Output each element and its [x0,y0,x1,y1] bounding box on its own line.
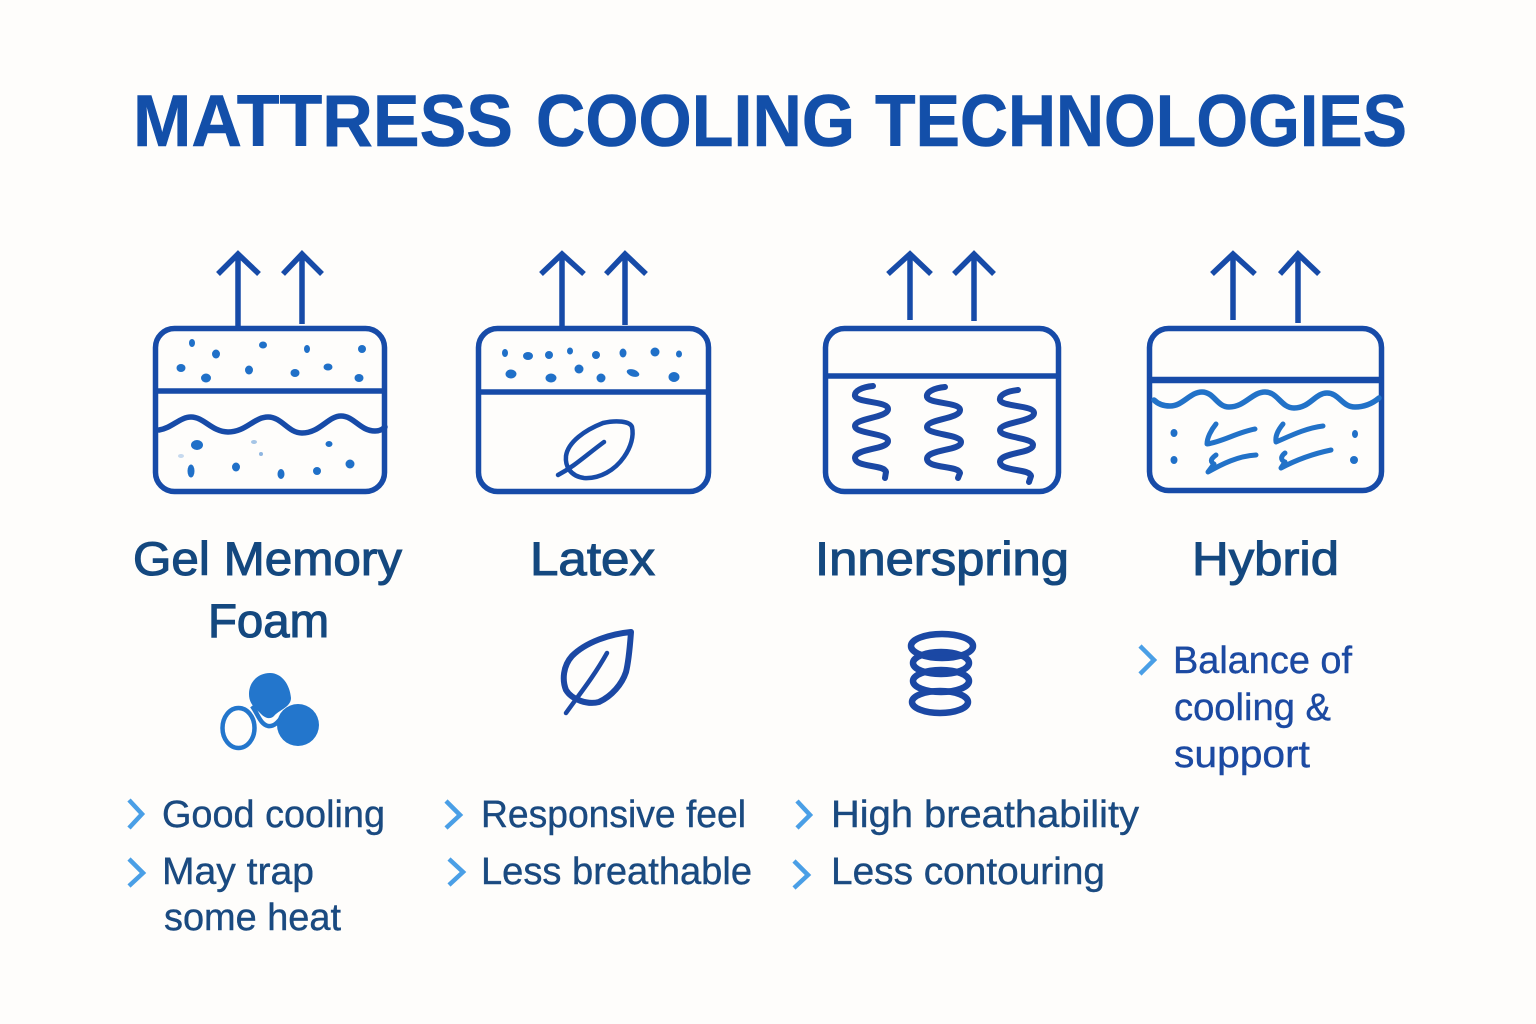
title: MATTRESS [133,81,513,162]
title [133,81,1407,162]
diagram: gel foam mattress [156,328,385,492]
list: gel pros and cons: Good cooling [162,794,385,836]
heading: gel memory foam: Gel Memory [133,532,403,585]
diagram: hybrid mattress [1150,328,1382,490]
list: hybrid benefit: Balance of [1173,640,1352,682]
heading: gel memory foam [133,532,403,647]
list: latex pros and cons [446,794,752,893]
panel: hybrid [1140,254,1382,776]
list: hybrid benefit: support [1174,734,1310,776]
list: gel pros and cons: some heat [164,897,341,939]
panel: innerspring [794,254,1139,893]
icon: coil spring [911,634,973,713]
panel: gel memory foam [129,254,403,939]
icon: heat arrows hybrid [1212,254,1319,323]
list: latex pros and cons: Responsive feel [481,794,746,836]
panel: latex [446,254,752,893]
icon: heat arrows latex [541,254,646,327]
list: hybrid benefit [1140,640,1352,776]
list: innerspring pros and cons: Less contouring [831,851,1105,893]
list: hybrid benefit: cooling & [1174,687,1331,729]
list: gel pros and cons: May trap [162,851,314,893]
diagram: innerspring mattress [826,328,1058,492]
list: innerspring pros and cons [794,794,1139,893]
title: COOLING [536,81,855,162]
diagram: latex mattress [478,328,708,492]
heading: latex: Latex [530,532,655,585]
list: innerspring pros and cons: High breathability [831,794,1139,836]
heading: innerspring: Innerspring [815,532,1069,585]
heading: gel memory foam: Foam [208,594,329,647]
list: latex pros and cons: Less breathable [481,851,752,893]
icon: leaf [564,632,631,713]
icon: heat arrows gel [218,254,322,328]
icon: gel beads [222,673,319,748]
title: TECHNOLOGIES [875,81,1407,162]
list: gel pros and cons [129,794,385,939]
icon: heat arrows innerspring [888,254,994,321]
heading: hybrid: Hybrid [1192,532,1339,585]
